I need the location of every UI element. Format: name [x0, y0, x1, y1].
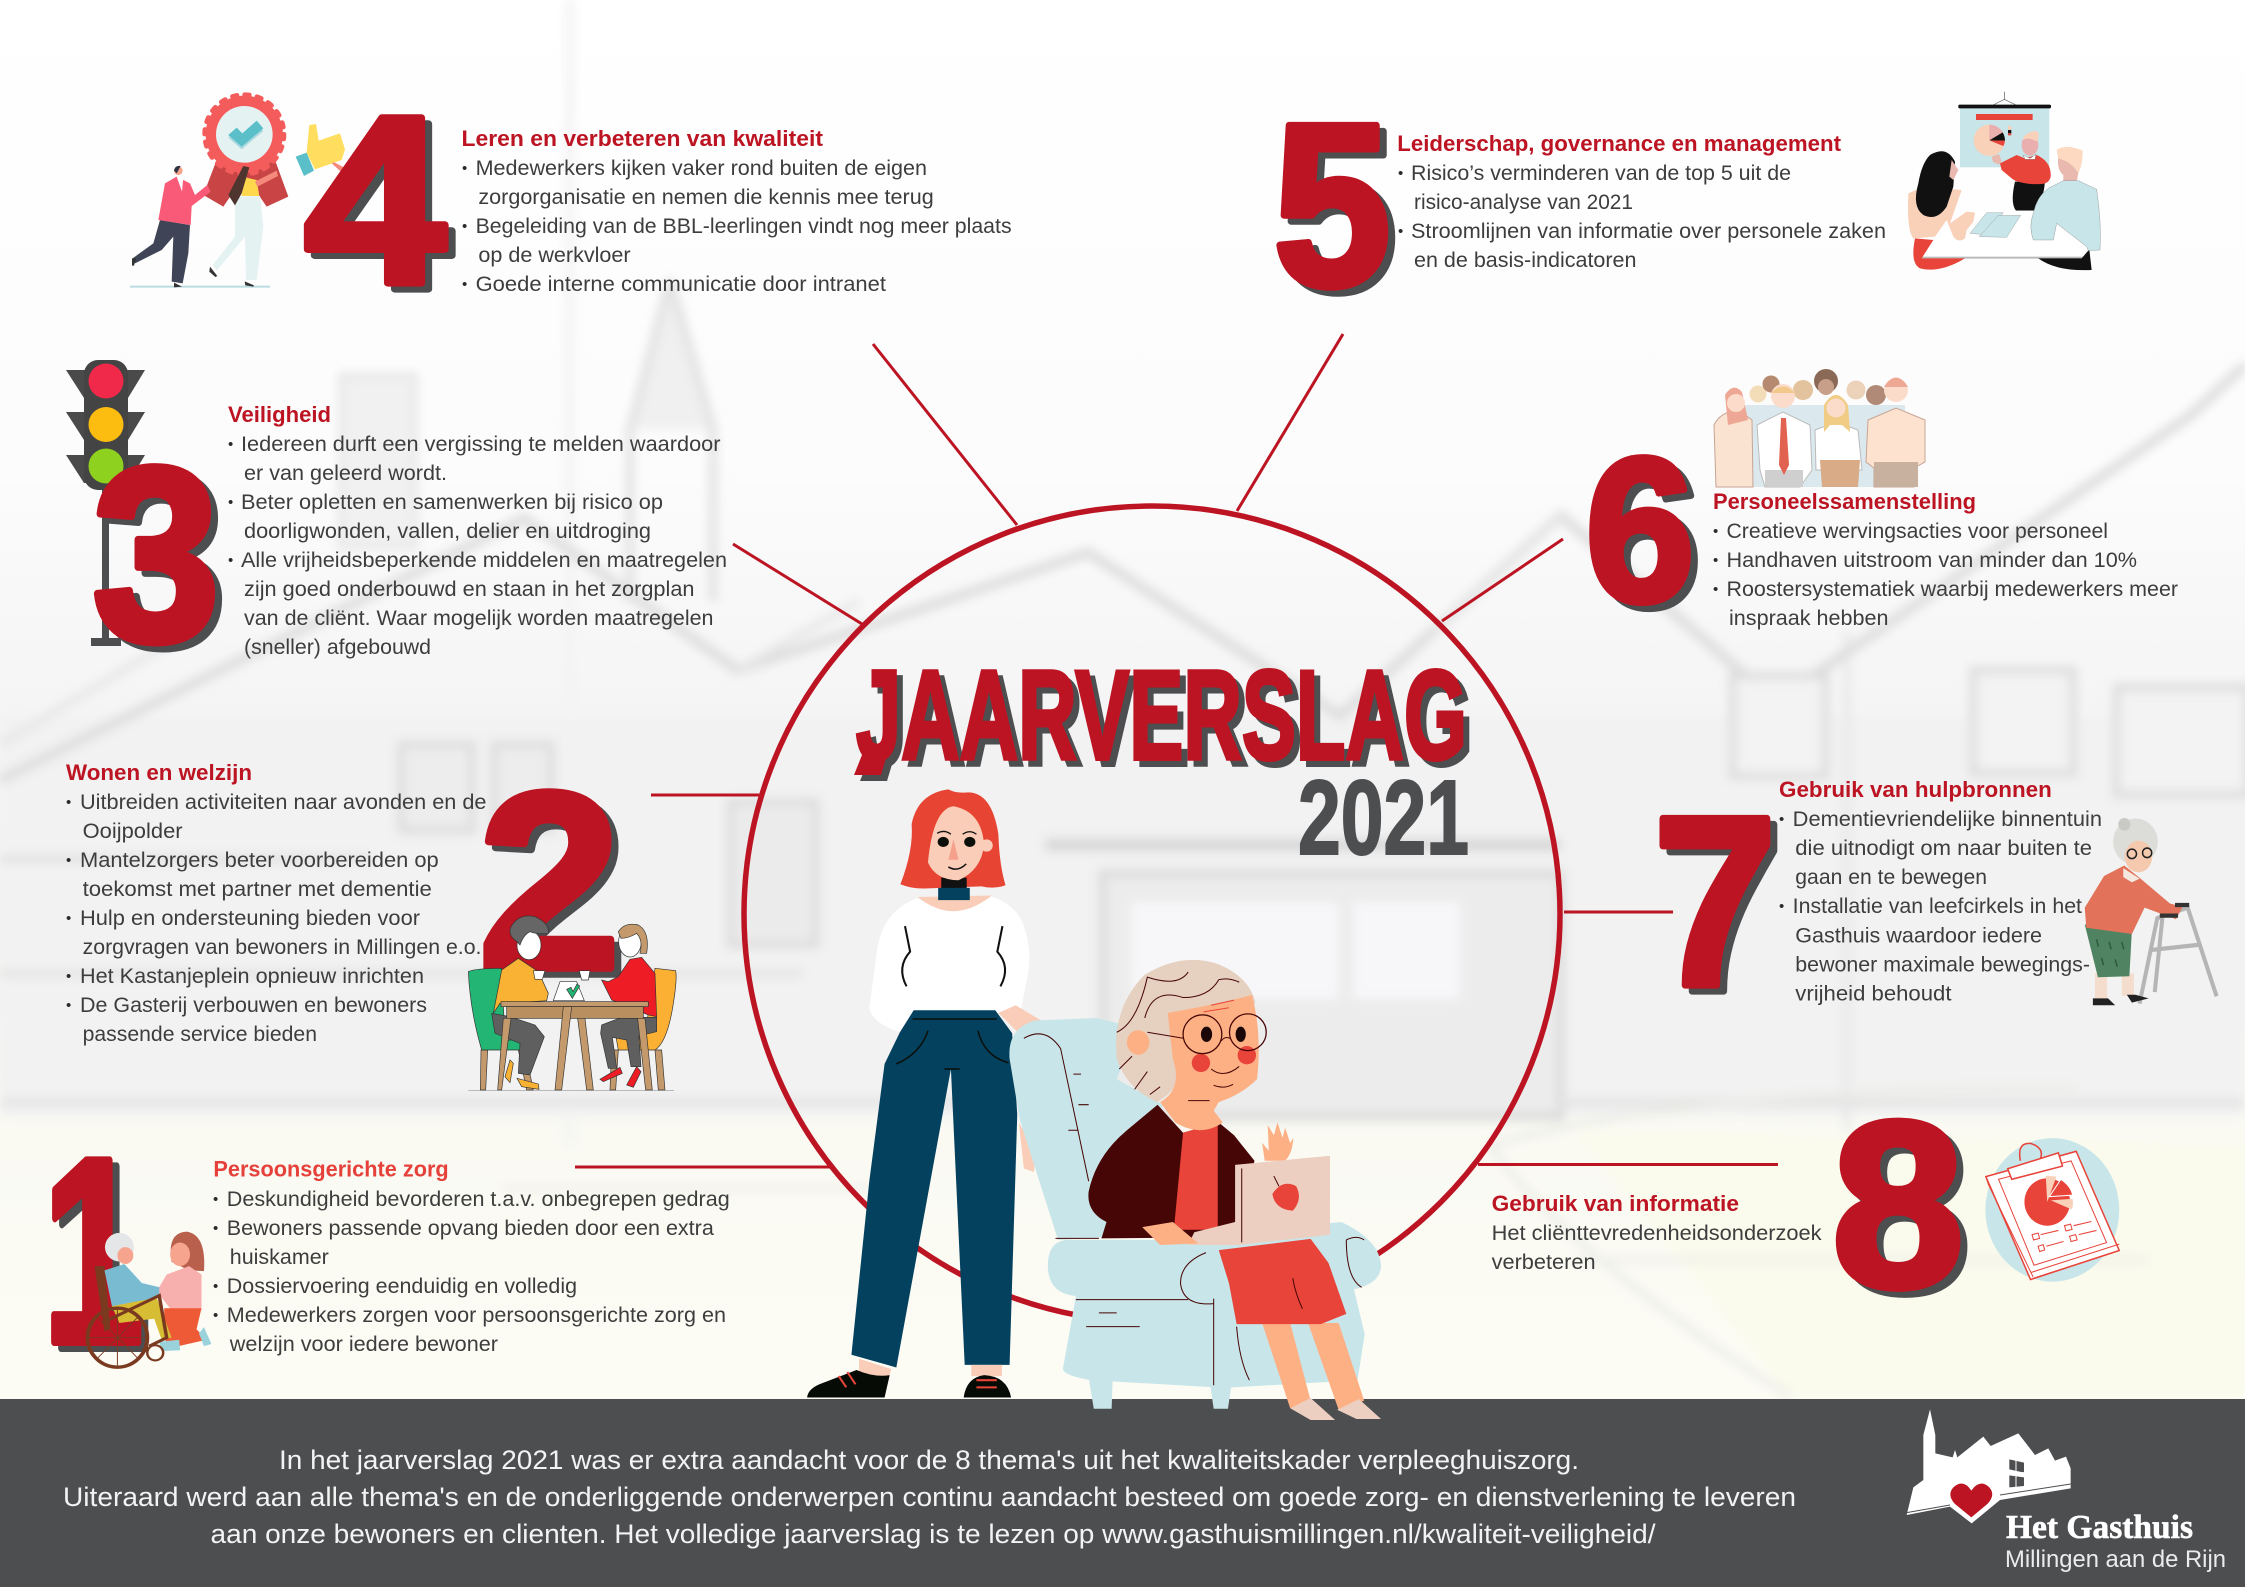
heading: Gebruik van informatie	[1492, 1191, 1739, 1216]
bullet list: vrijheid behoudt	[1795, 982, 1952, 1006]
laptop with strawberry	[1188, 1156, 1330, 1245]
heading: Veiligheid	[228, 402, 331, 427]
elderly woman hair	[1116, 960, 1256, 1102]
bullet list	[213, 1188, 730, 1356]
icon: people with quality badge and thumb	[130, 95, 350, 287]
bullet list: •	[66, 852, 71, 869]
bullet list: Bewoners passende opvang bieden door een extra	[227, 1217, 714, 1240]
bullet list: •	[1713, 581, 1718, 598]
bullet list: •	[213, 1307, 218, 1324]
bullet list: Installatie van leefcirkels in het	[1793, 895, 2082, 918]
footer text: Uiteraard werd aan alle thema's en de onderliggende onderwerpen continu aandacht besteed om goede zorg- en dienstverlening te leveren	[63, 1482, 1796, 1512]
body text: verbeteren	[1492, 1251, 1596, 1274]
bullet list: •	[462, 276, 467, 293]
heading: Leren en verbeteren van kwaliteit	[462, 126, 824, 151]
bullet list: •	[1713, 523, 1718, 540]
panel: theme 1 Persoonsgerichte zorg	[42, 1104, 730, 1399]
bullet list: gaan en te bewegen	[1795, 866, 1987, 889]
number 8: 8	[1832, 1073, 1964, 1337]
bullet list: en de basis-indicatoren	[1414, 249, 1636, 272]
icon: carer with resident in wheelchair	[88, 1232, 211, 1367]
heading: Persoonsgerichte zorg	[213, 1156, 449, 1182]
woman hair	[900, 789, 1006, 889]
bullet list: Alle vrijheidsbeperkende middelen en maatregelen	[241, 549, 727, 572]
logo: Het Gasthuis	[1907, 1409, 2226, 1573]
year 2021: 2021	[1298, 759, 1469, 877]
bullet list: Roostersystematiek waarbij medewerkers meer	[1726, 578, 2178, 601]
bullet list: Goede interne communicatie door intranet	[476, 273, 886, 296]
panel: theme 7 Gebruik van hulpbronnen	[1653, 767, 2217, 1037]
bullet list	[462, 157, 1012, 296]
panel: theme 4 Leren en verbeteren	[130, 65, 1012, 334]
bullet list	[1713, 520, 2178, 630]
skirt	[1219, 1239, 1346, 1324]
bullet list: •	[462, 218, 467, 235]
bullet list: zijn goed onderbouwd en staan in het zorgplan	[244, 578, 694, 601]
raised hand	[1262, 1123, 1293, 1161]
body text	[1492, 1222, 1822, 1274]
bullet list: Handhaven uitstroom van minder dan 10%	[1726, 549, 2137, 572]
bullet list: •	[1398, 165, 1403, 182]
bullet list: •	[213, 1191, 218, 1208]
connector lines between circle and themes	[575, 334, 1778, 1167]
bullet list: •	[66, 997, 71, 1014]
icon: elderly woman with walker	[2085, 818, 2217, 1005]
number 3: 3	[92, 415, 220, 693]
bullet list	[1398, 162, 1886, 272]
bullet list: •	[66, 910, 71, 927]
bullet list: er van geleerd wordt.	[244, 462, 447, 485]
icon: group of colleagues	[1714, 369, 1925, 487]
title	[854, 644, 1467, 786]
woman trousers	[851, 1010, 1017, 1367]
panel: theme 8 Gebruik van informatie	[1492, 1073, 2119, 1337]
icon: two people at a cafe table	[468, 916, 676, 1090]
elderly woman legs and shoes	[1262, 1323, 1364, 1410]
bullet list: die uitnodigt om naar buiten te	[1795, 837, 2092, 860]
bullet list: •	[462, 160, 467, 177]
bullet list: Dossiervoering eenduidig en volledig	[227, 1275, 577, 1298]
bullet list: Begeleiding van de BBL-leerlingen vindt nog meer plaats	[476, 215, 1012, 238]
bullet list: Iedereen durft een vergissing te melden waardoor	[241, 433, 720, 456]
bullet list	[1779, 808, 2102, 1006]
bullet list: huiskamer	[230, 1246, 329, 1269]
bullet list: zorgvragen van bewoners in Millingen e.o.	[83, 936, 481, 959]
bullet list: •	[228, 552, 233, 569]
number 1: 1	[42, 1104, 144, 1399]
panel: theme 3 Veiligheid	[66, 360, 727, 693]
elderly woman jacket	[1088, 1105, 1254, 1238]
bullet list: •	[66, 794, 71, 811]
icon: traffic light	[66, 360, 145, 646]
body text: Het cliënttevredenheidsonderzoek	[1492, 1222, 1822, 1245]
bullet list	[66, 791, 486, 1046]
footer bar	[0, 1399, 2245, 1587]
woman feet and shoes	[859, 1359, 1002, 1376]
icon: clipboard with pie chart	[1985, 1138, 2119, 1282]
bullet list: Deskundigheid bevorderen t.a.v. onbegrepen gedrag	[227, 1188, 730, 1211]
bullet list: Ooijpolder	[83, 820, 183, 843]
icon: meeting with presentation	[1908, 92, 2100, 270]
bullet list: Gasthuis waardoor iedere	[1795, 924, 2042, 948]
bullet list: •	[66, 968, 71, 985]
bullet list: Het Kastanjeplein opnieuw inrichten	[80, 965, 424, 988]
bullet list: op de werkvloer	[478, 244, 631, 267]
bullet list: Risico’s verminderen van de top 5 uit de	[1411, 162, 1791, 185]
bullet list: Dementievriendelijke binnentuin	[1793, 808, 2102, 831]
bullet list: Mantelzorgers beter voorbereiden op	[80, 849, 439, 872]
woman face	[928, 806, 993, 890]
bullet list: •	[228, 494, 233, 511]
logo mark: building and heart	[1907, 1409, 2071, 1523]
bullet list: inspraak hebben	[1729, 607, 1888, 630]
bullet list	[228, 433, 727, 659]
panel: theme 5 Leiderschap	[1273, 76, 2100, 335]
bullet list: •	[213, 1278, 218, 1295]
elderly woman face	[1117, 972, 1266, 1130]
logo name: Het Gasthuis	[2006, 1509, 2193, 1546]
bullet list: Hulp en ondersteuning bieden voor	[80, 907, 420, 930]
bullet list: Creatieve wervingsacties voor personeel	[1726, 520, 2108, 543]
illustration: standing woman and seated elderly woman	[807, 789, 1381, 1420]
bullet list: De Gasterij verbouwen en bewoners	[80, 994, 427, 1017]
logo location: Millingen aan de Rijn	[2005, 1546, 2226, 1573]
bullet list: •	[1713, 552, 1718, 569]
number 4: 4	[304, 65, 446, 334]
bullet list: Medewerkers kijken vaker rond buiten de eigen	[476, 157, 927, 180]
heading: Gebruik van hulpbronnen	[1779, 777, 2052, 802]
bullet list: Beter opletten en samenwerken bij risico op	[241, 491, 663, 514]
bullet list: •	[1398, 223, 1403, 240]
woman sweater	[869, 897, 1029, 1032]
bullet list: •	[1779, 811, 1784, 828]
bullet list: bewoner maximale bewegings-	[1795, 954, 2090, 976]
number 2: 2	[478, 740, 621, 1022]
hand on chair	[998, 1005, 1041, 1034]
title: JAARVERSLAG	[856, 644, 1467, 786]
bullet list: passende service bieden	[83, 1023, 317, 1046]
bullet list: •	[1779, 898, 1784, 915]
bullet list: van de cliënt. Waar mogelijk worden maatregelen	[244, 607, 714, 630]
footer text: aan onze bewoners en clienten. Het volledige jaarverslag is te lezen op www.gasthuismillingen.nl/kwaliteit-veiligheid/	[210, 1519, 1656, 1549]
heading: Wonen en welzijn	[66, 760, 252, 785]
panel: theme 6 Personeelssamenstelling	[1585, 369, 2178, 645]
footer text: In het jaarverslag 2021 was er extra aandacht voor de 8 thema's uit het kwaliteitskader verpleeghuiszorg.	[279, 1445, 1579, 1475]
typing hand	[1142, 1222, 1198, 1245]
central circle	[744, 506, 1560, 1322]
bullet list: risico-analyse van 2021	[1414, 191, 1633, 214]
bullet list: zorgorganisatie en nemen die kennis mee terug	[478, 186, 934, 209]
number 7: 7	[1653, 767, 1777, 1037]
number 5: 5	[1273, 76, 1391, 335]
number 6: 6	[1585, 414, 1695, 645]
bullet list: welzijn voor iedere bewoner	[229, 1333, 498, 1356]
panel: theme 2 Wonen en welzijn	[66, 740, 676, 1090]
bullet list: Medewerkers zorgen voor persoonsgerichte zorg en	[227, 1304, 726, 1327]
bullet list: Uitbreiden activiteiten naar avonden en de	[80, 791, 486, 814]
footer text	[63, 1445, 1796, 1549]
heading: Leiderschap, governance en management	[1397, 131, 1842, 156]
heading: Personeelssamenstelling	[1713, 489, 1976, 514]
bullet list: Stroomlijnen van informatie over personele zaken	[1411, 220, 1886, 243]
bullet list: •	[228, 436, 233, 453]
bullet list: (sneller) afgebouwd	[244, 636, 431, 659]
bullet list: •	[213, 1220, 218, 1237]
bullet list: doorligwonden, vallen, delier en uitdroging	[244, 520, 651, 543]
armchair	[1009, 1018, 1381, 1409]
bullet list: toekomst met partner met dementie	[83, 878, 432, 901]
